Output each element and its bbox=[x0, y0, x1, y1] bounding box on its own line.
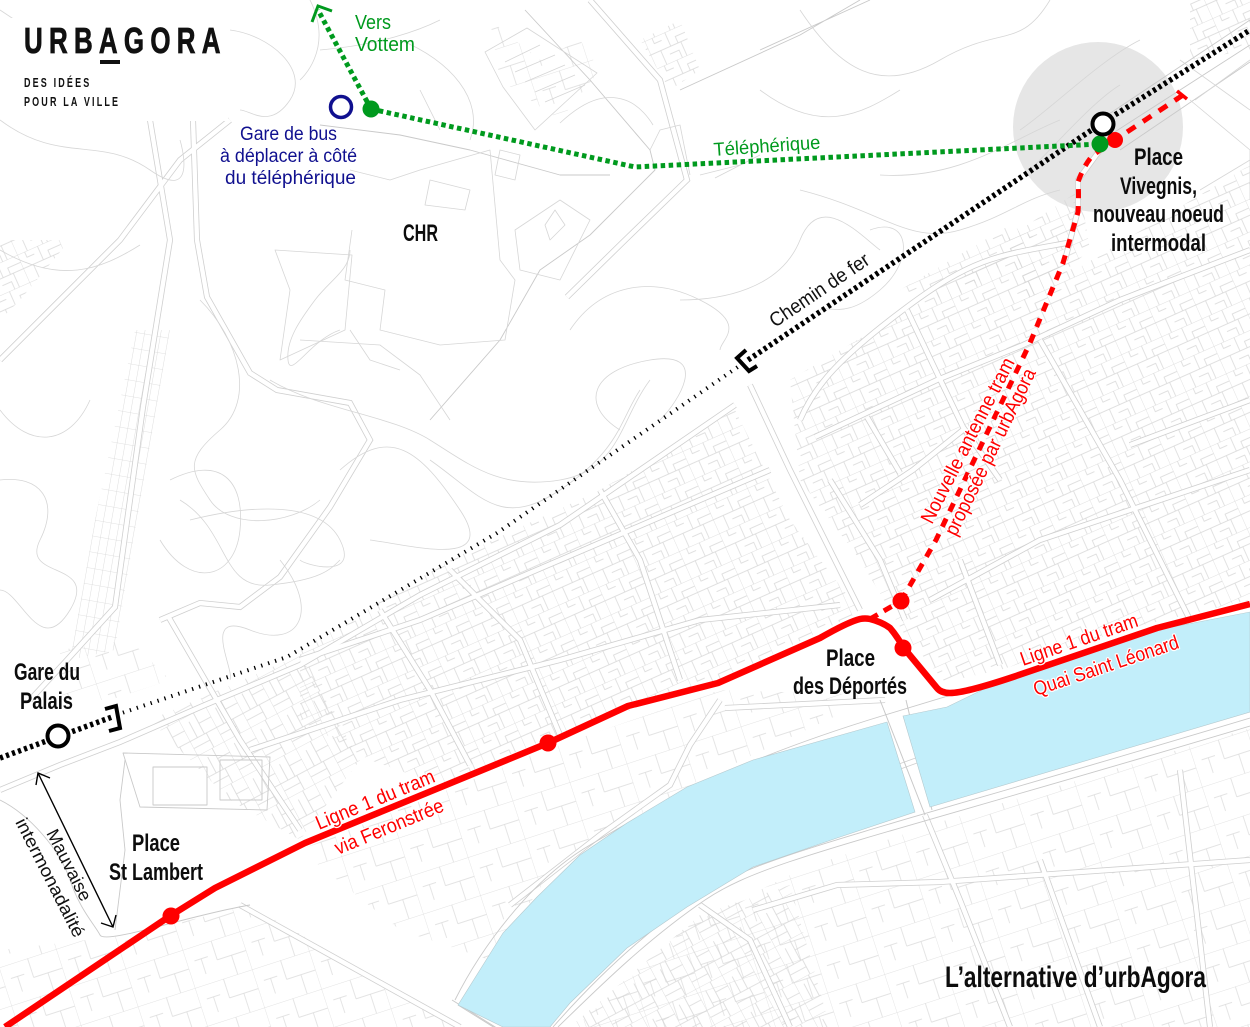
parking block outlines bbox=[485, 28, 597, 130]
label: Gare du Palais bbox=[14, 659, 80, 715]
label: tram line, via Feronstrée bbox=[312, 766, 447, 860]
label: bus station: à déplacer à côté bbox=[220, 146, 357, 167]
label: tram line, Quai Saint Léonard bbox=[1017, 610, 1182, 701]
bus station marker bbox=[330, 96, 352, 118]
label: bus station bbox=[220, 124, 357, 189]
label: tram line, via Feronstrée: via Feronstrée bbox=[331, 795, 447, 860]
cable car to Vottem bbox=[318, 10, 371, 109]
label: Chemin de fer: Chemin de fer bbox=[765, 249, 874, 332]
station marker Gare du Palais bbox=[48, 726, 68, 746]
logo tagline: DES IDÉES bbox=[24, 76, 91, 90]
proposed tram branch, south dash bbox=[870, 601, 901, 619]
label: Place St Lambert: St Lambert bbox=[109, 859, 203, 886]
stop: Vivegnis cable car bbox=[1092, 136, 1108, 152]
logo wordmark: URBAGORA bbox=[24, 21, 227, 61]
label: Téléphérique: Téléphérique bbox=[713, 133, 821, 161]
stop: CHR cable car bbox=[362, 100, 380, 118]
arrowhead to Vottem bbox=[312, 6, 332, 22]
label: Mauvaise intermodalité: Mauvaise bbox=[42, 826, 96, 904]
tram line 1 bbox=[5, 604, 1250, 1027]
label: Vers Vottem bbox=[355, 12, 415, 56]
railway bracket west bbox=[105, 706, 120, 731]
logo tagline: POUR LA VILLE bbox=[24, 96, 120, 109]
label: Place des Déportés bbox=[793, 645, 907, 700]
railway bracket east bbox=[737, 350, 757, 371]
label: Place des Déportés: des Déportés bbox=[793, 673, 907, 700]
tram branch end cap bbox=[1177, 91, 1187, 99]
label: Place Vivegnis bbox=[1093, 144, 1224, 257]
railway, thick segment east bbox=[748, 30, 1250, 360]
stop: Place Saint-Lambert bbox=[162, 908, 180, 924]
label: new tram branch: proposée par urbAgora bbox=[941, 364, 1041, 539]
label: Vers Vottem: Vottem bbox=[355, 34, 415, 56]
label: Place Vivegnis: Place bbox=[1134, 144, 1183, 171]
river Meuse, downstream reach bbox=[458, 722, 915, 1027]
proposed tram branch, north extension bbox=[1115, 95, 1183, 140]
stop: Feronstrée bbox=[540, 734, 556, 752]
label: Mauvaise intermodalité: intermonadalité bbox=[11, 815, 89, 941]
label: tram line, via Feronstrée: Ligne 1 du tram bbox=[312, 766, 438, 835]
label: Place St Lambert: Place bbox=[132, 830, 180, 857]
double arrow: bad intermodality bbox=[36, 773, 116, 927]
logo panel bbox=[8, 18, 228, 121]
label: new tram branch: Nouvelle antenne tram bbox=[917, 354, 1020, 527]
stop: antenna start bbox=[892, 592, 910, 610]
label: bus station: du téléphérique bbox=[225, 168, 356, 189]
label: Place Vivegnis: intermodal bbox=[1111, 230, 1206, 257]
river Meuse, upstream reach bbox=[903, 612, 1250, 807]
railway, thick segment west bbox=[0, 717, 112, 758]
label: Vers Vottem: Vers bbox=[355, 12, 391, 34]
station marker Vivegnis bbox=[1092, 114, 1114, 134]
cable car line bbox=[371, 109, 1100, 167]
label: bus station: Gare de bus bbox=[240, 124, 337, 145]
label: Gare du Palais: Gare du bbox=[14, 659, 80, 686]
node highlight circle bbox=[1013, 42, 1183, 212]
label: tram line, Quai Saint Léonard: Ligne 1 du tram bbox=[1017, 610, 1141, 671]
label: Place Vivegnis: Vivegnis, bbox=[1120, 173, 1197, 200]
railway, thin disused segment bbox=[116, 362, 745, 715]
logo underline bbox=[100, 60, 120, 64]
label: Gare du Palais: Palais bbox=[20, 688, 73, 715]
label: CHR: CHR bbox=[403, 220, 438, 247]
label: Place St Lambert bbox=[109, 830, 203, 886]
bridge deck bbox=[880, 700, 932, 815]
stop: Déportés bbox=[894, 640, 912, 656]
proposed tram branch bbox=[901, 140, 1115, 601]
CHR building outlines bbox=[275, 150, 590, 420]
logo tagline bbox=[24, 76, 120, 109]
label: Place des Déportés: Place bbox=[826, 645, 875, 672]
label: tram line, Quai Saint Léonard: Quai Saint Léonard bbox=[1031, 632, 1182, 701]
stop: Vivegnis tram bbox=[1107, 132, 1123, 148]
